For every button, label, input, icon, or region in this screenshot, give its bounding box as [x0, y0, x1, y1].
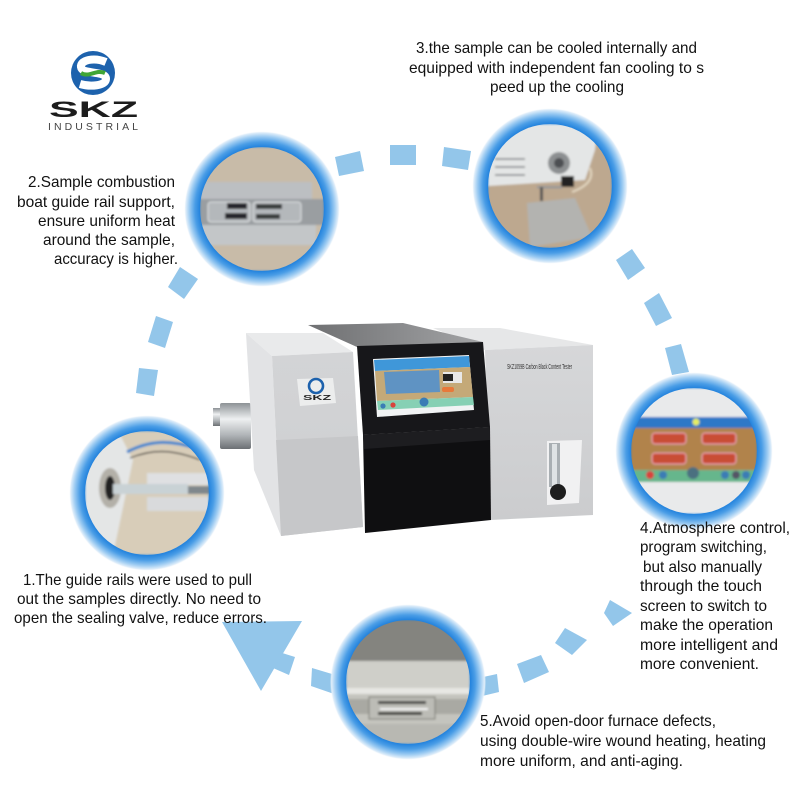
glow ring: [330, 604, 486, 760]
text 4: atmosphere control: [640, 520, 790, 673]
text 3: cooling: [409, 40, 704, 96]
text 1: guide rails: open the sealing valve, reduce errors.: [14, 610, 267, 627]
photo 1: guide rails: [69, 415, 225, 571]
logo: SKZ Industrial: [48, 51, 138, 133]
text 2: guide rail support: boat guide rail support,: [17, 194, 175, 211]
glow ring: [615, 372, 773, 530]
text 2: guide rail support: accuracy is higher.: [54, 251, 178, 268]
text 2: guide rail support: [17, 174, 178, 268]
text 4: atmosphere control: but also manually: [643, 559, 762, 576]
logo wordmark: SKZ: [49, 97, 138, 122]
photo 5: furnace heating: [330, 604, 486, 760]
text 3: cooling: equipped with independent fan cooling to s: [409, 60, 704, 77]
text 5: furnace: [480, 713, 766, 770]
text 4: atmosphere control: program switching,: [640, 539, 767, 556]
photo: [346, 620, 470, 744]
text 4: atmosphere control: through the touch: [640, 578, 762, 595]
text 3: cooling: 3.the sample can be cooled internally and: [416, 40, 697, 57]
model label: SKZ1059B Carbon Black Content Tester: [507, 364, 572, 371]
arrow head: [222, 621, 302, 691]
right housing: [433, 328, 593, 520]
photo: [200, 147, 324, 271]
center top: [308, 323, 483, 347]
glow ring: [472, 108, 628, 264]
icon: logo ring: [71, 51, 115, 95]
photo 2: combustion boat rail: [184, 131, 340, 287]
text 5: furnace: more uniform, and anti-aging.: [480, 753, 683, 770]
logo subtitle: INDUSTRIAL: [48, 121, 138, 133]
flowmeter: [547, 440, 582, 505]
text 5: furnace: using double-wire wound heating, heating: [480, 733, 766, 750]
text 5: furnace: 5.Avoid open-door furnace defects,: [480, 713, 716, 730]
glow ring: [184, 131, 340, 287]
text 2: guide rail support: ensure uniform heat: [38, 213, 176, 230]
machine logo plate: SKZ: [303, 395, 332, 402]
text 1: guide rails: 1.The guide rails were used to pull: [23, 572, 252, 589]
dashed circular arrow: [134, 145, 689, 698]
text 4: atmosphere control: 4.Atmosphere control,: [640, 520, 790, 537]
glow ring: [69, 415, 225, 571]
touch screen: [373, 355, 474, 417]
text 1: guide rails: [14, 572, 267, 627]
text 4: atmosphere control: more intelligent and: [640, 637, 778, 654]
knob: sample port: [213, 403, 251, 449]
black console: [357, 342, 491, 533]
photo: [488, 124, 612, 248]
text 4: atmosphere control: make the operation: [640, 617, 773, 634]
photo 3: fan cooling: [472, 108, 628, 264]
left housing: [246, 333, 363, 536]
text 4: atmosphere control: more convenient.: [640, 656, 759, 673]
text 2: guide rail support: 2.Sample combustion: [28, 174, 175, 191]
machine: [213, 323, 593, 536]
text 1: guide rails: out the samples directly. No need to: [17, 591, 261, 608]
machine logo plate: [297, 378, 336, 406]
text 2: guide rail support: around the sample,: [43, 232, 175, 249]
photo: [85, 431, 209, 555]
text 3: cooling: peed up the cooling: [490, 79, 624, 96]
photo: [631, 388, 757, 514]
text 4: atmosphere control: screen to switch to: [640, 598, 767, 615]
photo 4: touch screen: [615, 372, 773, 530]
